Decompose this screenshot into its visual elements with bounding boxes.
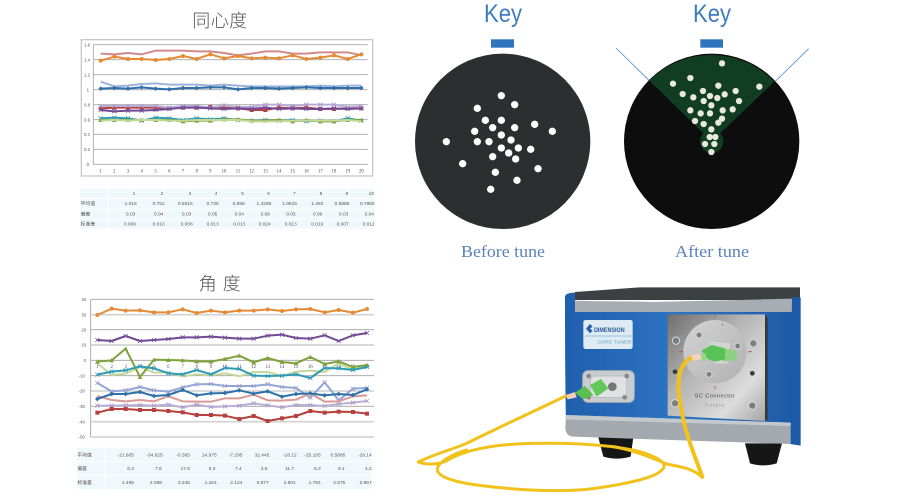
data table: angle: -29.14 (358, 452, 372, 458)
key marker (after) (700, 39, 723, 48)
data table: concentricity: 0.04 (235, 212, 244, 218)
line chart: angle: 1 (96, 365, 99, 370)
brand label: DIMENSION (594, 327, 625, 334)
data table: angle: -18.12 (283, 452, 297, 458)
line chart: angle: 4 (139, 365, 142, 370)
data table: concentricity: 标准差 (81, 221, 95, 228)
line chart: concentricity: 1.4 (84, 57, 91, 62)
data table: concentricity: 1.018 (125, 201, 137, 207)
line chart: concentricity: 17 (318, 169, 323, 174)
data table: angle: -25.105 (304, 452, 321, 458)
data table: angle: 11.7 (285, 466, 294, 472)
line chart: angle: 20 (365, 365, 370, 370)
data table: concentricity: 0.752 (153, 201, 165, 207)
data table: concentricity: 0.008 (181, 222, 193, 228)
line chart: concentricity: 13 (263, 169, 268, 174)
line chart: concentricity: 11 (236, 169, 241, 174)
data table: angle: -21.605 (118, 452, 134, 458)
data table: concentricity: 7 (293, 191, 296, 197)
data table: concentricity (80, 189, 375, 229)
line chart: concentricity: 16 (304, 169, 309, 174)
data table: angle: 标准差 (77, 479, 92, 486)
SC connector plate (668, 314, 768, 421)
data table: angle (77, 448, 372, 489)
brand label (583, 320, 633, 349)
line chart: angle: 13 (265, 365, 271, 370)
line chart: concentricity (81, 40, 373, 176)
SC connector plate: Rotate (705, 403, 725, 409)
line chart: angle: -40 (79, 419, 86, 424)
data table: concentricity: 平均值 (81, 200, 95, 207)
line chart: concentricity: 18 (332, 169, 337, 174)
line chart: angle: -30 (79, 404, 86, 409)
data table: concentricity: 0.05 (286, 212, 296, 218)
line chart: angle: 14 (280, 365, 285, 370)
data table: concentricity: 0.03 (126, 212, 136, 218)
data table: concentricity: 1.4285 (257, 201, 272, 207)
line chart: concentricity: 0.2 (84, 147, 91, 152)
data table: concentricity: 0.007 (337, 222, 349, 228)
line chart: concentricity: 12 (249, 169, 255, 174)
line chart: concentricity: 14 (277, 169, 282, 174)
data table: angle: 14.975 (202, 452, 217, 458)
data table: angle: 平均值 (77, 451, 92, 458)
data table: concentricity: 10 (369, 191, 374, 197)
data table: angle: 0.877 (257, 480, 269, 486)
line chart: concentricity: 15 (290, 169, 296, 174)
line chart: angle: 10 (81, 343, 87, 348)
data table: concentricity: 0.03 (182, 212, 192, 218)
data table: concentricity: 6 (267, 191, 270, 197)
line chart: angle: 3 (125, 365, 128, 370)
line chart: angle: 20 (81, 327, 87, 332)
data table: angle: 32.445 (255, 452, 270, 458)
data table: angle: 5.3 (314, 466, 321, 472)
line chart: angle: 5 (153, 365, 156, 370)
data table: concentricity: 1.483 (311, 201, 324, 207)
line chart: angle: 18 (336, 365, 342, 370)
line chart: angle: -10 (79, 373, 86, 378)
data table: concentricity: 0.013 (207, 222, 219, 228)
data table: angle: 7.4 (235, 466, 242, 472)
line chart: angle: 8 (196, 365, 199, 370)
data table: angle: 3.245 (178, 480, 190, 486)
data table: angle: -0.365 (176, 452, 190, 458)
line chart: angle: 2 (111, 365, 114, 370)
data table: concentricity: 0.009 (124, 222, 136, 228)
panel: before tune (415, 0, 590, 261)
line chart: angle: 12 (251, 365, 257, 370)
brand label: CORE TUNER (597, 340, 632, 345)
data table: angle: 5.3 (209, 466, 216, 472)
caption: after tune: After tune (675, 242, 749, 261)
line chart: angle: 6 (167, 365, 170, 370)
fiber end face with scattered cores (415, 54, 590, 229)
line chart: angle: 11 (237, 365, 242, 370)
data table: concentricity: 0.04 (154, 212, 164, 218)
data table: concentricity: 0.010 (153, 222, 165, 228)
data table: concentricity: 0.013 (233, 222, 246, 228)
data table: concentricity: 0.024 (259, 222, 271, 228)
line chart: concentricity: 19 (345, 169, 351, 174)
data table: angle: 2.124 (230, 480, 243, 486)
line chart: concentricity: 9 (209, 169, 212, 174)
data table: angle: 2.901 (284, 480, 296, 486)
data table: concentricity: 5 (241, 191, 244, 197)
data table: angle: 1.495 (122, 480, 134, 486)
data table: angle: 0.967 (360, 480, 372, 486)
label: Key (after): Key (693, 0, 731, 28)
data table: concentricity: 8 (320, 191, 323, 197)
data table: angle: 2.088 (150, 480, 162, 486)
data table: angle: 2.575 (333, 480, 346, 486)
data table: concentricity: 0.05 (208, 212, 218, 218)
data table: angle: -34.625 (146, 452, 163, 458)
line chart: concentricity: 10 (222, 169, 227, 174)
device feet (598, 437, 782, 465)
data table: concentricity: 0.739 (207, 201, 219, 207)
data table: concentricity: 0.5885 (335, 201, 350, 207)
line chart: concentricity: 0.4 (84, 132, 91, 137)
data table: angle: 1.784 (309, 480, 321, 486)
data table: angle: 9.1 (338, 466, 345, 472)
data table: concentricity: 1.0615 (282, 201, 297, 207)
line chart: angle: 30 (81, 312, 87, 317)
line chart: concentricity: 7 (182, 169, 185, 174)
data table: angle: 17.6 (181, 466, 190, 472)
line chart: angle: -20 (79, 389, 86, 394)
left port with green connector (566, 371, 634, 402)
line chart: concentricity: 6 (168, 169, 171, 174)
data table: concentricity: 偏差 (81, 211, 90, 218)
line chart: angle: 7 (182, 365, 185, 370)
data table: concentricity: 0.06 (313, 212, 323, 218)
fiber boot (right) (691, 353, 702, 361)
heading: concentricity: 同心度 (192, 11, 248, 31)
line chart: concentricity: 3 (127, 169, 130, 174)
line chart: angle: -50 (79, 435, 86, 440)
line chart: concentricity: 2 (113, 169, 116, 174)
caption: before tune: Before tune (461, 242, 545, 261)
photo: core tuner device with yellow fiber (418, 287, 801, 491)
key marker (before) (491, 39, 514, 48)
data table: angle: 1.424 (205, 480, 217, 486)
line chart: concentricity: 20 (359, 169, 364, 174)
data table: concentricity: 0.012 (363, 222, 375, 228)
line chart: concentricity: 5 (155, 169, 158, 174)
line chart: concentricity: 4 (141, 169, 144, 174)
line chart: angle: 9 (210, 365, 213, 370)
data table: concentricity: 4 (215, 191, 218, 197)
line chart: concentricity: 1.2 (84, 72, 91, 77)
data table: concentricity: 0.5915 (178, 201, 193, 207)
data table: concentricity: 0.7855 (360, 201, 375, 207)
data table: concentricity: 2 (161, 191, 164, 197)
line chart: concentricity: 8 (196, 169, 199, 174)
data table: angle: 3.6 (261, 466, 268, 472)
data table: angle: 偏差 (77, 465, 87, 472)
data table: concentricity: 0.04 (365, 212, 374, 218)
line chart: angle: 17 (322, 365, 328, 370)
device body (565, 287, 801, 446)
line chart: concentricity: 1 (100, 169, 103, 174)
data table: angle: 6.4 (127, 466, 134, 472)
data table: angle: -7.295 (229, 452, 243, 458)
data table: angle: 0.5885 (331, 452, 346, 458)
data table: concentricity: 0.598 (233, 201, 245, 207)
line chart: concentricity: 0.8 (84, 102, 91, 107)
data table: concentricity: 1 (133, 191, 136, 197)
line chart: concentricity: 0 (87, 162, 90, 167)
line chart: concentricity: 1.6 (84, 42, 91, 47)
yellow fiber patch cord (418, 357, 702, 491)
data table: concentricity: 0.013 (285, 222, 297, 228)
data table: concentricity: 3 (189, 191, 192, 197)
data table: angle: 4.2 (365, 466, 372, 472)
data table: concentricity: 9 (346, 191, 349, 197)
line chart: angle: 15 (294, 365, 299, 370)
data table: angle: 7.6 (155, 466, 162, 472)
data table: concentricity: 0.019 (311, 222, 324, 228)
line chart: angle: 40 (81, 297, 87, 302)
data table: concentricity: 0.08 (261, 212, 270, 218)
line chart: angle (79, 297, 374, 440)
line chart: concentricity: 0.6 (84, 117, 91, 122)
label: Key (before): Key (484, 0, 522, 28)
line chart: angle: 19 (351, 365, 356, 370)
heading: angle: 角 度 (199, 274, 241, 294)
fiber end face with aligned cores in sector (616, 48, 809, 229)
line chart: concentricity: 1 (87, 87, 90, 92)
line chart: angle: 16 (308, 365, 313, 370)
SC connector plate: SC Connector (695, 393, 735, 399)
line chart: angle: 0 (84, 358, 87, 363)
data table: concentricity: 0.03 (339, 212, 349, 218)
panel: after tune (616, 0, 809, 261)
line chart: angle: 10 (223, 365, 228, 370)
